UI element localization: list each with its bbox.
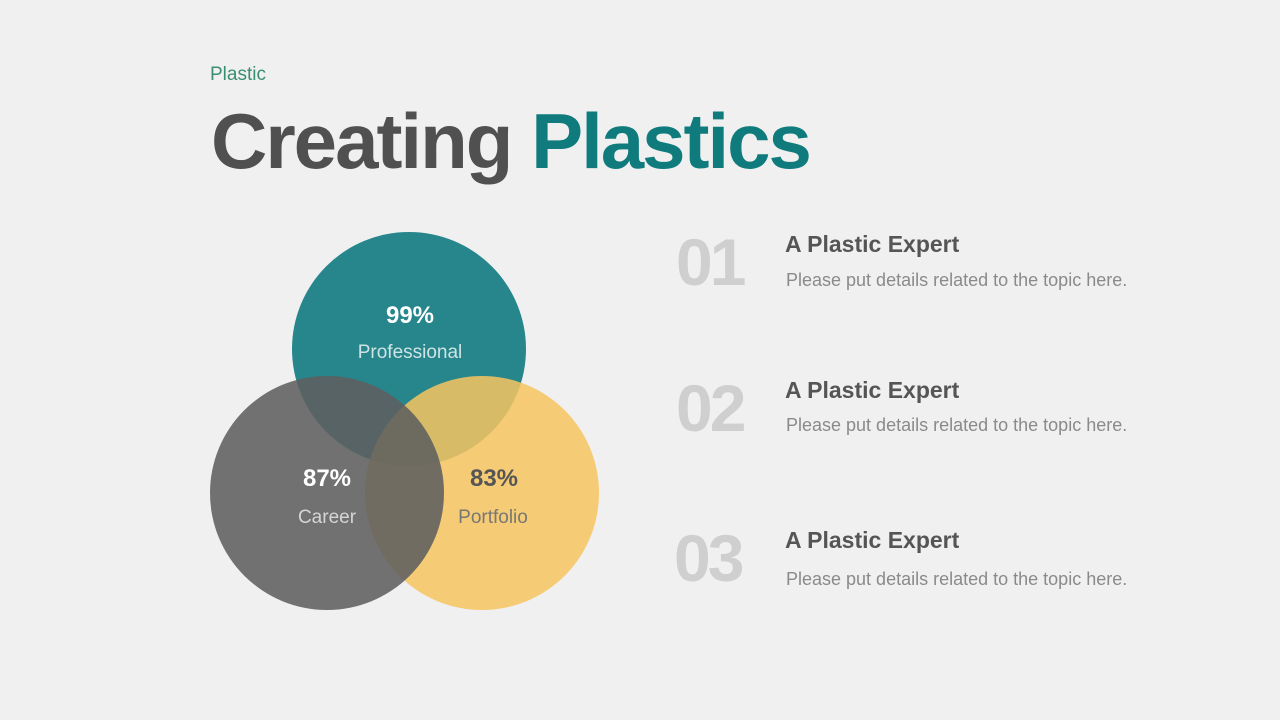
label: professional: 99% <box>386 302 434 329</box>
item 02 <box>676 371 1127 445</box>
subtitle: Plastic <box>210 64 266 85</box>
label: portfolio <box>458 465 528 528</box>
item 02: Please put details related to the topic here. <box>786 415 1127 435</box>
item 03: A Plastic Expert <box>785 527 959 553</box>
item 03: 03 <box>674 521 741 595</box>
circle: portfolio <box>365 376 599 610</box>
item 01: Please put details related to the topic here. <box>786 270 1127 290</box>
item 01: 01 <box>676 225 743 299</box>
label: professional <box>358 302 462 363</box>
circle: professional <box>292 232 526 466</box>
item 02: A Plastic Expert <box>785 377 959 403</box>
label: career: Career <box>298 507 357 528</box>
item 02: 02 <box>676 371 743 445</box>
label: career: 87% <box>303 465 351 492</box>
label: career <box>298 465 357 528</box>
label: professional: Professional <box>358 342 462 363</box>
label: portfolio: 83% <box>470 465 518 492</box>
item 01: A Plastic Expert <box>785 231 959 257</box>
venn diagram <box>210 232 599 610</box>
item 03: Please put details related to the topic here. <box>786 569 1127 589</box>
title: Creating Plastics <box>211 97 810 185</box>
item 03 <box>674 521 1127 595</box>
item 01 <box>676 225 1127 299</box>
circle: career <box>210 376 444 610</box>
label: portfolio: Portfolio <box>458 507 528 528</box>
